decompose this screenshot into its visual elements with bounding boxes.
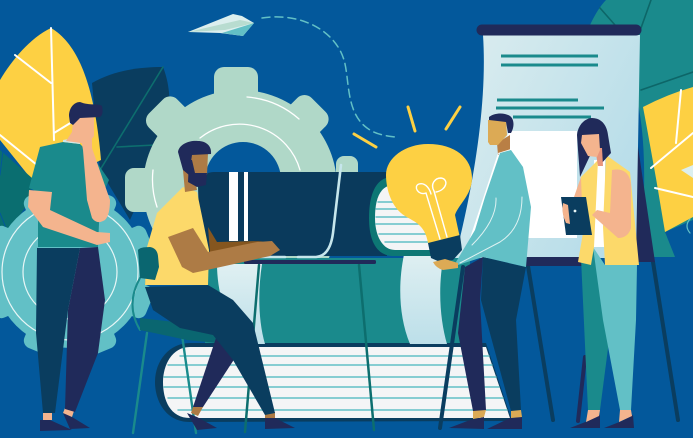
white top [594, 160, 605, 247]
sweater seams [460, 197, 522, 263]
leaf: dark left [92, 67, 170, 220]
far arm [208, 227, 263, 252]
trousers [581, 247, 610, 410]
white sheet area [470, 131, 577, 238]
neck and face [66, 114, 94, 144]
man seated at laptop [145, 141, 295, 430]
lower arm [28, 190, 110, 245]
hand [562, 203, 570, 224]
neck [595, 148, 603, 166]
vest [578, 155, 639, 265]
right yellow leaf [643, 87, 693, 232]
trousers [458, 257, 486, 411]
shoes [449, 417, 522, 429]
easel back leg [578, 357, 585, 421]
bottom book [155, 343, 512, 422]
shoes [40, 413, 90, 431]
hair [577, 118, 611, 177]
lightbulb [386, 144, 472, 270]
small paper plane at right edge [681, 165, 693, 178]
light rays [354, 107, 460, 147]
easel legs [528, 262, 678, 420]
tablet camera [574, 210, 576, 212]
collar [63, 137, 80, 144]
gear: left teal [0, 186, 156, 358]
middle book [205, 250, 470, 344]
bulb base [428, 235, 462, 262]
hair [178, 141, 211, 175]
hair [489, 113, 514, 133]
leaf: yellow left [0, 28, 101, 190]
gear: large mint [125, 67, 358, 284]
right arm [592, 170, 631, 238]
raised arm [80, 130, 110, 222]
shoes [570, 415, 634, 428]
sweater [456, 150, 531, 267]
beard [188, 160, 207, 187]
small gear arc at right edge [687, 219, 690, 233]
top bar [482, 24, 636, 36]
far leg [193, 335, 235, 407]
chair legs and seat [132, 278, 217, 433]
laptop [248, 165, 341, 257]
text lines [496, 56, 604, 117]
tablet [561, 197, 592, 235]
easel brace [630, 133, 655, 262]
front easel leg [440, 267, 463, 428]
man standing thinking [28, 102, 110, 431]
face [581, 134, 600, 157]
trousers [36, 248, 80, 413]
holding hands [433, 259, 458, 270]
woman with tablet [561, 118, 639, 428]
desk [244, 260, 376, 432]
shirt [145, 187, 209, 285]
paper plane [188, 14, 254, 36]
bulb-side book pages [369, 178, 432, 256]
face [191, 153, 208, 176]
right teal leaf [590, 0, 693, 257]
top dark book [198, 172, 387, 256]
hair [69, 102, 103, 125]
feet [586, 410, 632, 422]
filament [416, 178, 447, 239]
bottom tray [526, 257, 588, 266]
face [488, 120, 507, 145]
flip chart [455, 30, 678, 421]
left arm [574, 177, 586, 205]
chart paper [455, 35, 640, 258]
leaf: teal left [0, 150, 32, 233]
neck [183, 165, 197, 192]
near leg [145, 285, 275, 415]
dashed flight path [262, 17, 395, 137]
near arm [168, 228, 280, 273]
collar [498, 149, 512, 158]
shirt [29, 142, 109, 247]
near ankle [265, 412, 275, 418]
ankles [43, 408, 75, 420]
chair back [138, 247, 159, 280]
man with lightbulb [440, 113, 531, 429]
ankles [473, 410, 522, 419]
neck [497, 135, 510, 155]
far ankle [191, 407, 203, 416]
shoes [187, 413, 295, 430]
